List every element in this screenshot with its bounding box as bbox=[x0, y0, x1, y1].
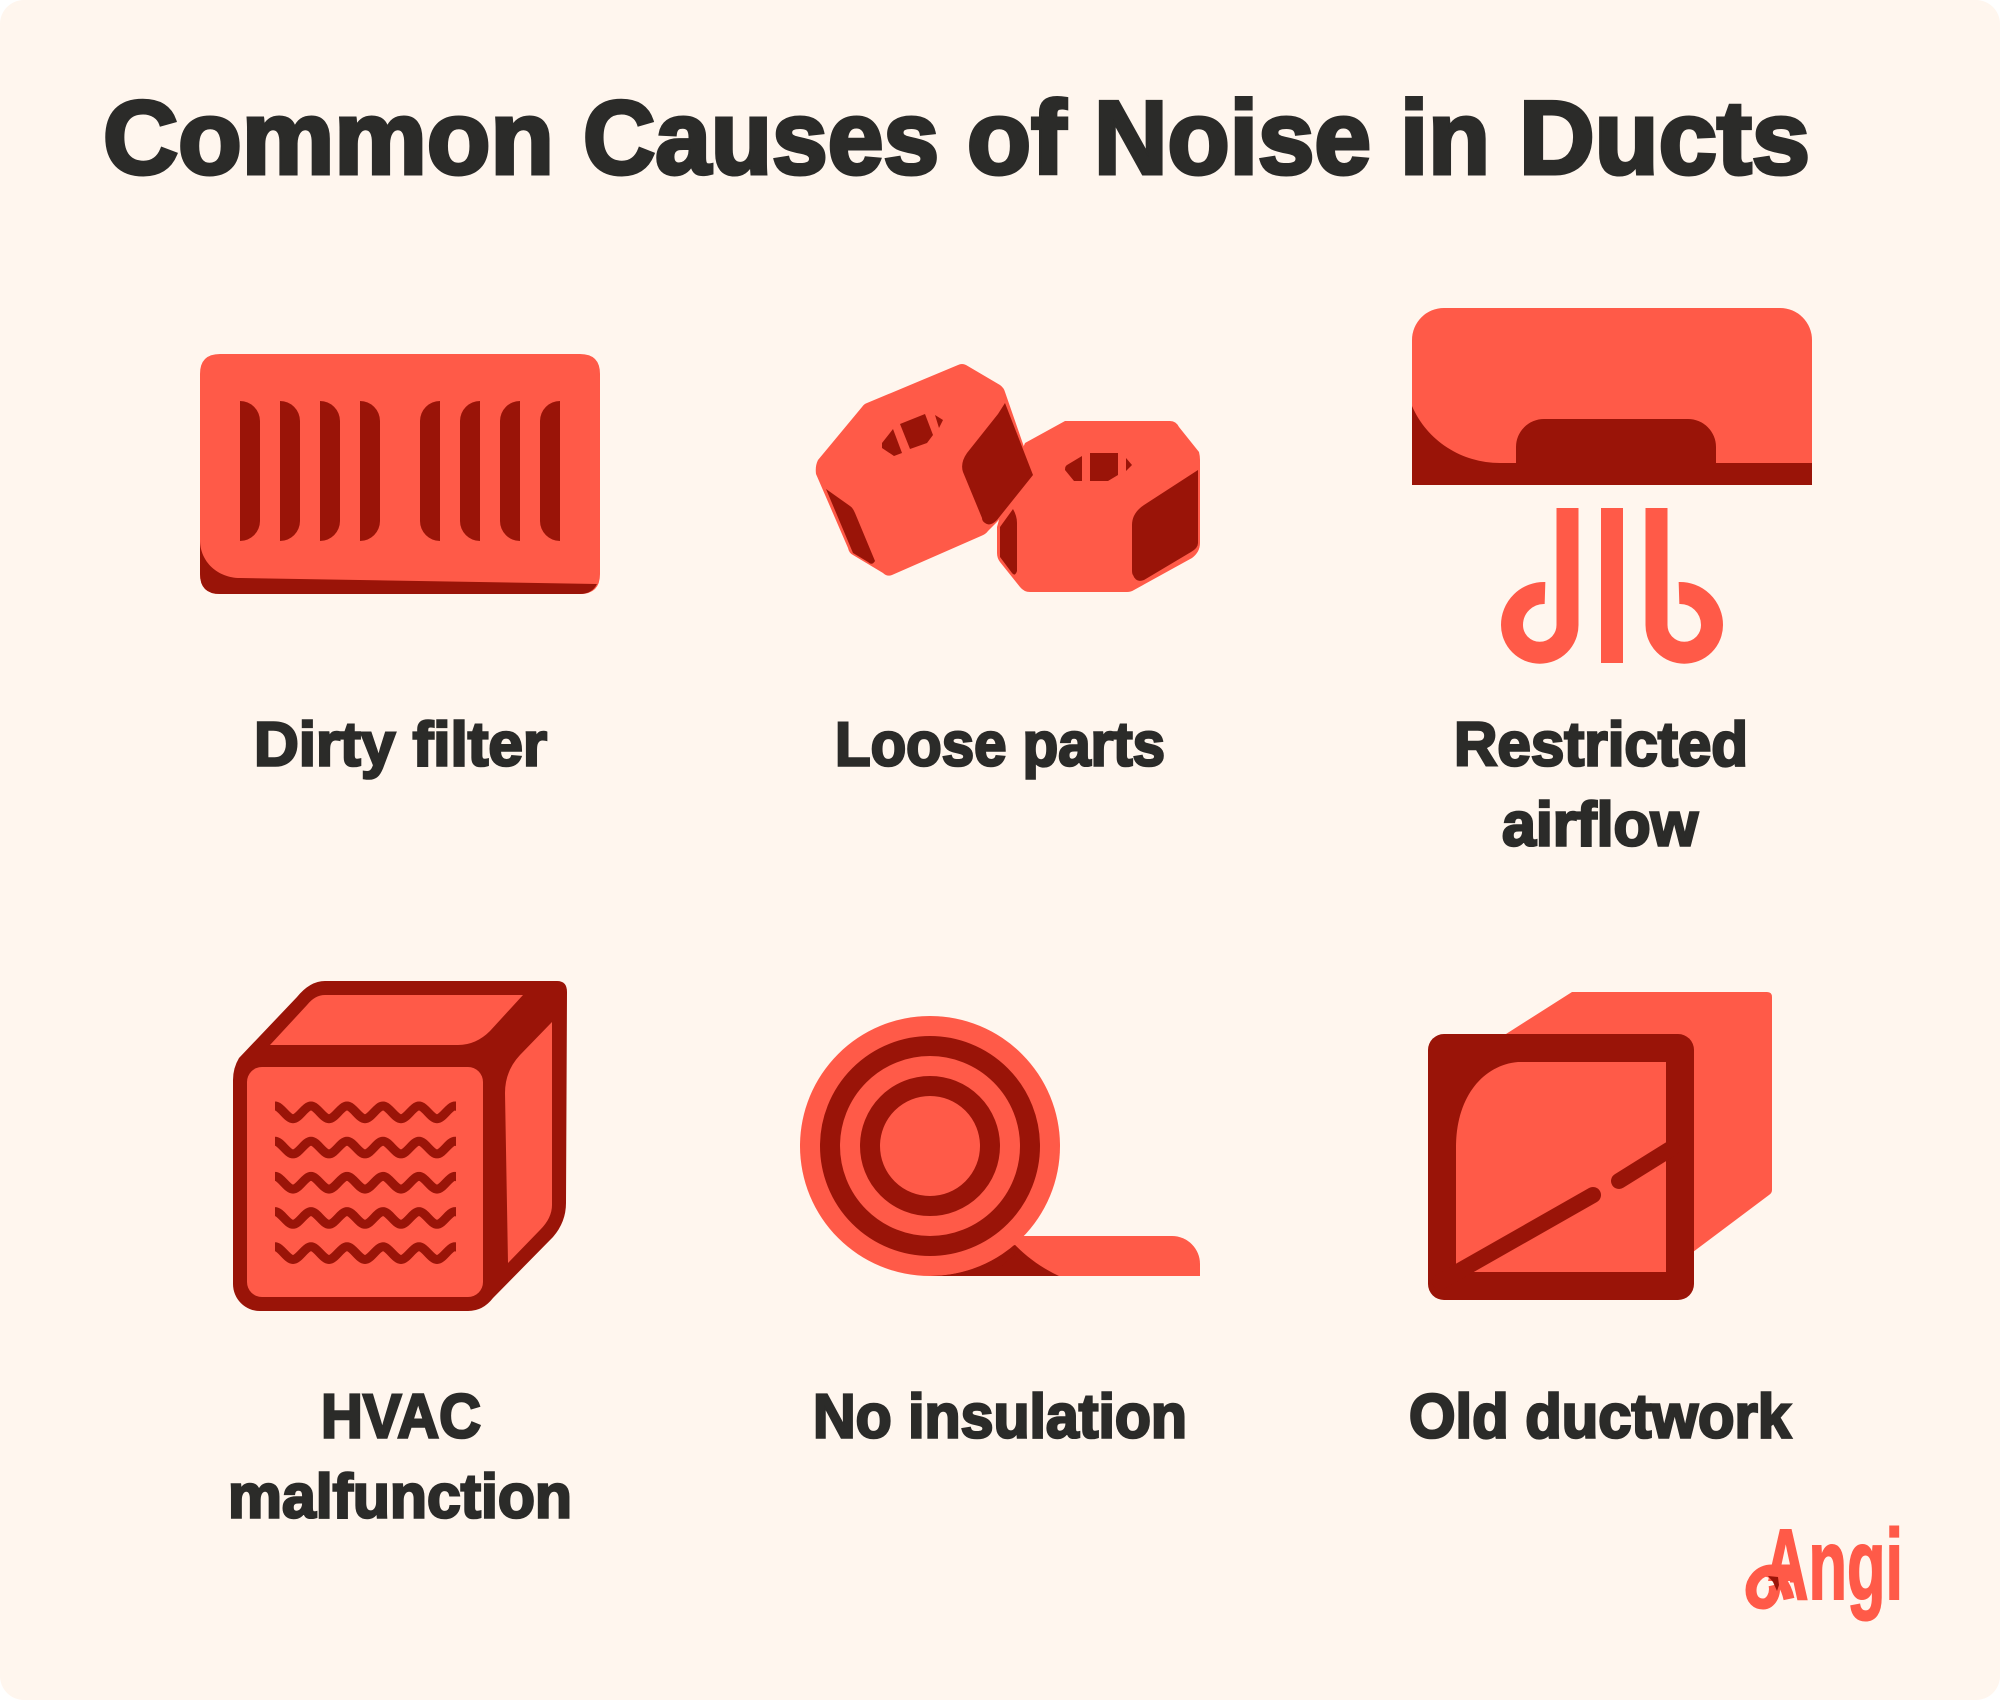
title: in bbox=[1400, 80, 1490, 196]
label: HVAC malfunction bbox=[228, 1382, 572, 1532]
title: Noise bbox=[1094, 80, 1371, 196]
icon: no insulation roll bbox=[800, 1016, 1200, 1276]
label: restricted airflow bbox=[1454, 710, 1748, 860]
label: old ductwork: Old ductwork bbox=[1409, 1382, 1791, 1452]
icon: restricted airflow bbox=[1412, 308, 1812, 663]
icon: dirty filter bbox=[200, 354, 600, 594]
label: loose parts: Loose parts bbox=[835, 710, 1165, 780]
label: restricted airflow: Restricted bbox=[1454, 710, 1748, 780]
label: dirty filter: Dirty filter bbox=[254, 710, 547, 780]
title: of bbox=[967, 80, 1066, 196]
icon: old ductwork bbox=[1428, 992, 1772, 1300]
title: Common bbox=[103, 80, 554, 196]
label: no insulation: No insulation bbox=[813, 1382, 1187, 1452]
title: Causes bbox=[583, 80, 939, 196]
label: HVAC malfunction: malfunction bbox=[228, 1462, 572, 1532]
title bbox=[103, 80, 1810, 196]
logo: Angi: Angi bbox=[1763, 1508, 1903, 1621]
title: Ducts bbox=[1519, 80, 1810, 196]
icon: HVAC malfunction bbox=[233, 981, 567, 1311]
label: restricted airflow: airflow bbox=[1502, 790, 1699, 860]
label: HVAC malfunction: HVAC bbox=[321, 1382, 481, 1452]
icon: loose parts bbox=[816, 364, 1200, 592]
